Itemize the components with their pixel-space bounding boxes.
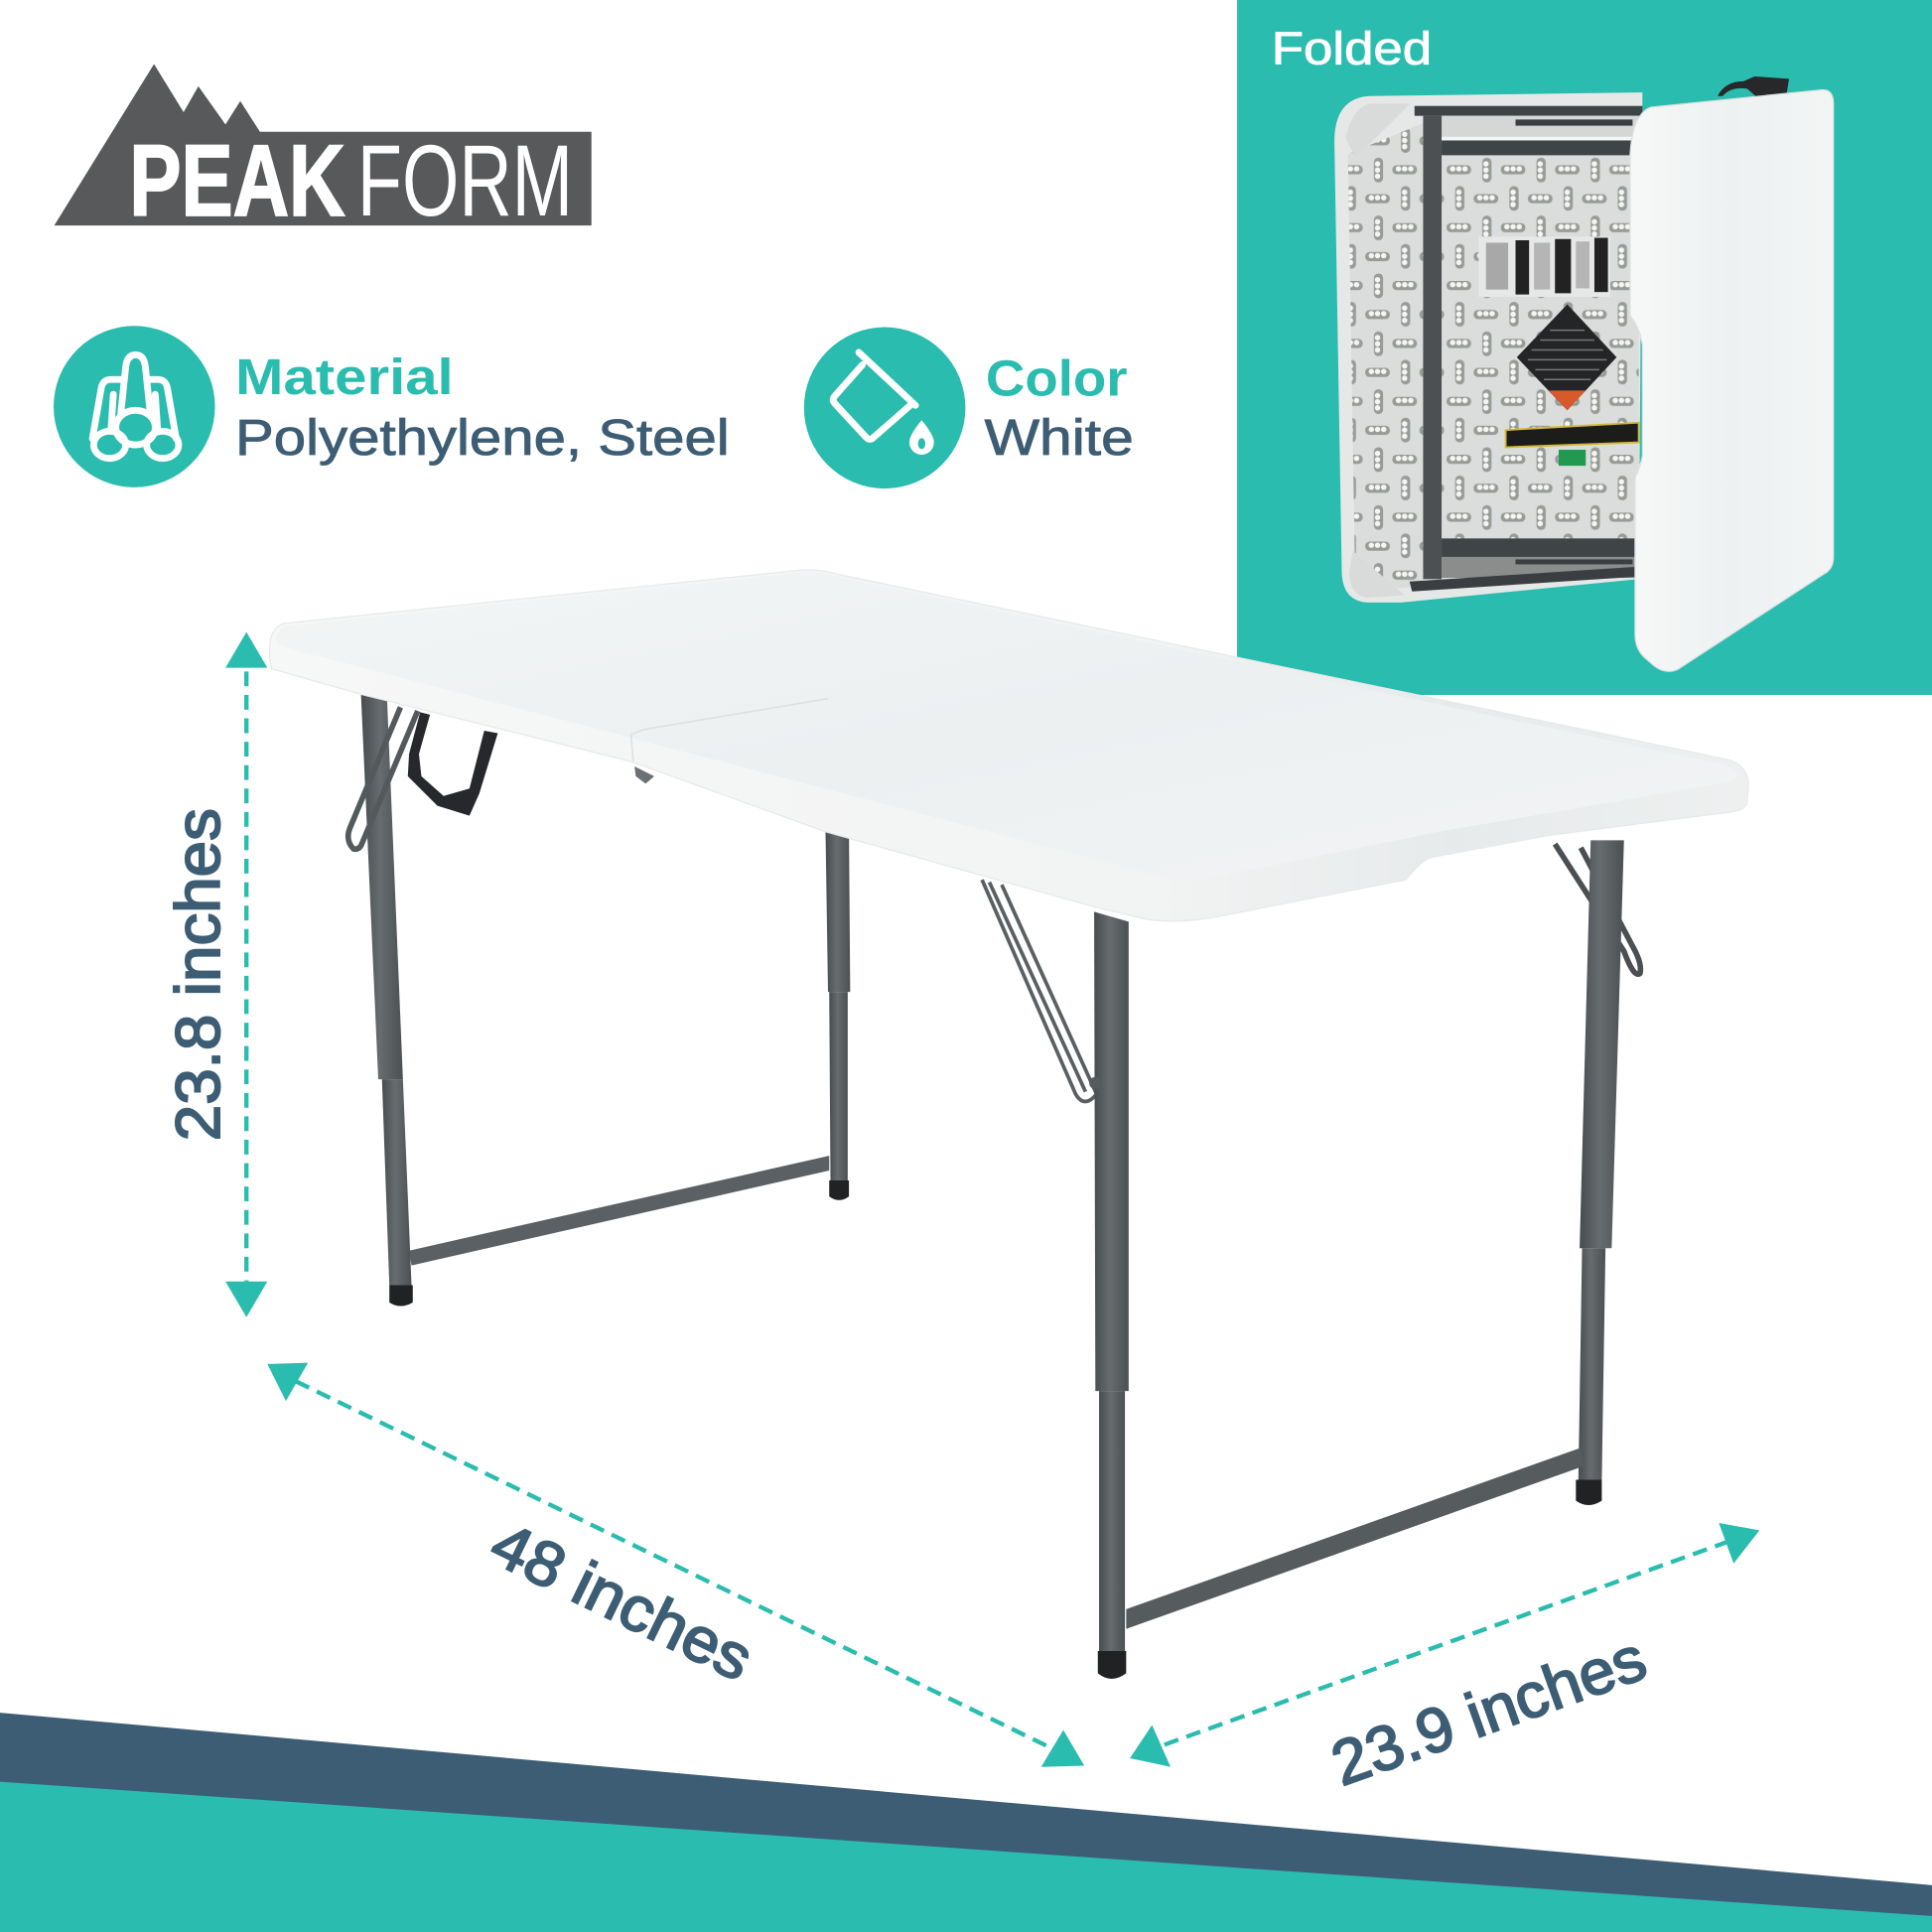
dimension: length (267, 1363, 1084, 1767)
dimension: width (1130, 1523, 1759, 1799)
folded table: underside (1334, 92, 1642, 603)
front leg (1094, 911, 1129, 1679)
icon: paint bucket (804, 328, 965, 488)
carry strap (408, 712, 497, 816)
sticker: green (1559, 450, 1586, 466)
value: White: White (985, 409, 1134, 466)
logo: PeakForm: FORM (357, 124, 573, 237)
table: rear legs (348, 695, 1640, 1307)
label: Color: Color (986, 349, 1128, 406)
panel background (1237, 0, 1932, 695)
table: front legs (982, 840, 1624, 1679)
label: 23.8 inches: 23.8 inches (164, 808, 233, 1141)
back-left leg (361, 695, 413, 1307)
label: 48 inches: 48 inches (481, 1509, 763, 1695)
sticker: white label (1478, 236, 1610, 297)
right leg (1576, 840, 1624, 1505)
heading: Folded: Folded (1272, 23, 1432, 74)
right brace (rear) (1555, 844, 1640, 974)
logo: PeakForm: PEAK (129, 124, 345, 237)
bottom band: teal (0, 1782, 1932, 1932)
right crossbar (1126, 1448, 1584, 1629)
arrow: width (1130, 1523, 1759, 1767)
hinge (634, 766, 654, 783)
table edge (269, 570, 1748, 921)
left brace (348, 707, 418, 849)
table surface (276, 572, 1738, 880)
table: top (269, 570, 1748, 921)
arrow: length (267, 1363, 1084, 1767)
front brace (982, 880, 1097, 1102)
sticker: yellow warning (1506, 423, 1639, 448)
folded table: front half (1630, 90, 1834, 671)
panel: folded (1237, 0, 1932, 695)
feature: color (804, 328, 1134, 488)
label: Material: Material (235, 348, 454, 405)
dimension: height (164, 632, 267, 1317)
table seam (630, 699, 828, 761)
value: Polyethylene, Steel: Polyethylene, Steel (235, 409, 730, 466)
bottom band: dark (0, 1713, 1932, 1932)
label: 23.9 inches: 23.9 inches (1322, 1623, 1655, 1799)
folded table: handle (1718, 76, 1789, 97)
arrow: height (225, 632, 267, 1317)
icon: pipes (54, 326, 215, 487)
back-right leg (826, 832, 850, 1200)
sticker: black diamond (1517, 305, 1616, 410)
back crossbar (409, 1156, 829, 1266)
feature: material (54, 326, 730, 487)
logo: PeakForm (55, 65, 592, 237)
